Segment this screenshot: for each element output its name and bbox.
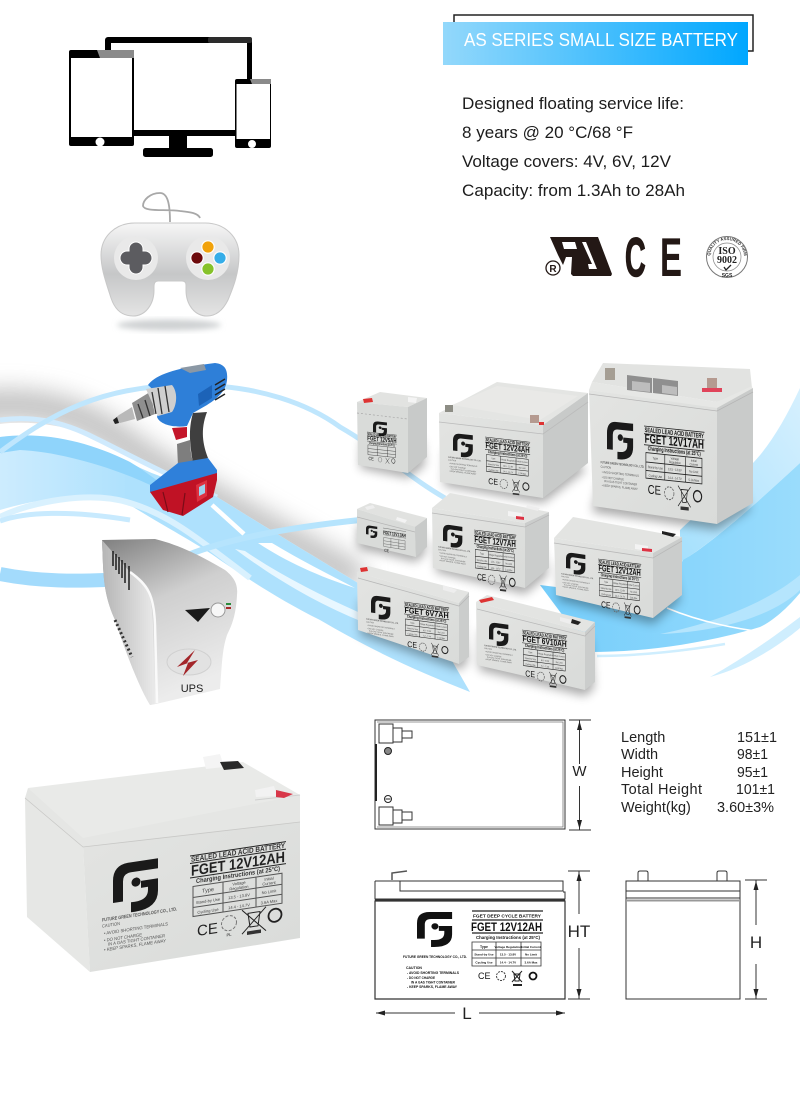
battery: 12V17AH: • KEEP SPARKS, FLAME AWAY bbox=[602, 483, 638, 491]
icon: monitor bbox=[105, 37, 252, 157]
battery: 12V7AH: • KEEP SPARKS, FLAME AWAY bbox=[439, 559, 467, 566]
label: caution: - DO NOT CHARGE bbox=[407, 976, 435, 980]
battery: 6V10AH: Stand-by Use bbox=[525, 657, 537, 661]
specification table: Total Height bbox=[621, 782, 702, 798]
battery: 12V17AH: CAUTION bbox=[601, 464, 611, 470]
battery: 12V24AH: • DO NOT CHARGE bbox=[449, 465, 466, 470]
battery: 12V17AH: 13.5 - 13.8V bbox=[668, 467, 682, 473]
battery: 12V12AH: • AVOID SHORTING TERMINALS bbox=[562, 578, 590, 585]
logo: FG mark bbox=[417, 912, 452, 947]
icon: cordless drill bbox=[113, 363, 227, 516]
battery: 12V7AH: No Limit bbox=[506, 562, 512, 566]
battery: 12V7AH: Type bbox=[480, 553, 484, 556]
specification table: 98±1 bbox=[737, 747, 768, 763]
specification table: Weight(kg) bbox=[621, 800, 691, 816]
battery: 12V12AH: 13.5 - 13.8V bbox=[615, 589, 625, 593]
battery: small 1.3Ah: FGET 12V1.3AH bbox=[383, 529, 406, 539]
battery: 6V10AH bbox=[476, 595, 595, 690]
battery: 6V7AH: SEALED LEAD ACID BATTERY bbox=[404, 602, 449, 613]
battery: 12V7AH: Voltage Regulation bbox=[488, 553, 504, 558]
label: caution: CAUTION bbox=[406, 966, 422, 970]
battery: 12V7AH: Charging Instructions (at 25°C) bbox=[477, 544, 514, 553]
caution text: IN A GAS TIGHT CONTAINER bbox=[108, 933, 166, 947]
battery: 12V17AH: CE bbox=[648, 483, 661, 498]
battery: 12V7AH: 14.4 - 14.7V bbox=[491, 567, 501, 571]
product label: PL bbox=[226, 932, 232, 938]
battery: 6V10AH: 7.2 - 7.4V bbox=[541, 666, 550, 669]
battery: 12V7AH: FGET 12V7AH bbox=[474, 534, 516, 550]
specification table: Length bbox=[621, 730, 665, 746]
feature text block: Voltage covers: 4V, 6V, 12V bbox=[462, 152, 672, 171]
product label: No Limit bbox=[262, 888, 277, 895]
dimension L bbox=[376, 1004, 565, 1023]
battery: 12V7AH: Cycling Use bbox=[477, 566, 487, 569]
product label: Cycling Use bbox=[197, 907, 219, 915]
icon: ISO seal: SGS bbox=[722, 273, 733, 279]
battery: 6V7AH: CE bbox=[407, 639, 417, 650]
battery: 12V12AH: Voltage Regulation bbox=[613, 581, 628, 587]
product label: Regulation bbox=[229, 884, 249, 892]
battery: 12V12AH: CE bbox=[601, 599, 611, 611]
battery: 6V10AH: No Limit bbox=[556, 661, 563, 665]
product label: FGET 12V12AH bbox=[191, 849, 285, 880]
feature text block: Capacity: from 1.3Ah to 28Ah bbox=[462, 181, 685, 200]
product label: 14.4 - 14.7V bbox=[228, 902, 250, 910]
battery: 12V24AH: 13.5 - 13.8V bbox=[503, 465, 514, 469]
icon: UPS unit: UPS bbox=[181, 683, 203, 695]
battery: 6V7AH: Stand-by Use bbox=[407, 627, 419, 631]
caution text: CAUTION bbox=[102, 921, 120, 929]
battery: 6V10AH: FUTURE GREEN TECHNOLOGY CO., LTD. bbox=[484, 645, 517, 652]
battery: 12V24AH: Initial Current bbox=[517, 460, 528, 464]
label: model: Type bbox=[480, 945, 488, 949]
battery: 12V24AH bbox=[439, 382, 588, 498]
battery: 12V24AH: 14.4 - 14.7V bbox=[503, 471, 514, 474]
battery: 6V10AH: Charging Instructions (at 25°C) bbox=[525, 643, 565, 653]
battery: 12V12AH: CAUTION bbox=[561, 575, 570, 579]
label: model: Initial Current bbox=[521, 945, 541, 949]
label: caution: IN A GAS TIGHT CONTAINER bbox=[411, 980, 456, 984]
icon: ISO seal: ISO bbox=[718, 246, 736, 257]
battery: 6V10AH: Type bbox=[528, 652, 533, 655]
specification table: 3.60±3% bbox=[717, 800, 774, 816]
product label: Charging Instructions (at 25°C) bbox=[196, 865, 280, 885]
battery: 12V17AH: No Limit bbox=[689, 469, 699, 475]
label: model: 3.6A Max bbox=[525, 960, 538, 964]
specification table: 95±1 bbox=[737, 765, 768, 781]
battery: 12V7AH: Stand-by Use bbox=[477, 558, 488, 563]
wave background bbox=[0, 385, 800, 720]
battery: 12V24AH: Type bbox=[491, 458, 496, 461]
top-view dimension drawing bbox=[375, 720, 591, 830]
battery: small 4: SEALED LEAD ACID BATTERY bbox=[367, 432, 396, 439]
label: model: No Limit bbox=[525, 952, 537, 956]
label: model: 13.5 - 13.8V bbox=[500, 952, 516, 956]
front-view dimension drawing bbox=[375, 871, 590, 1023]
battery: 6V7AH: Cycling Use bbox=[407, 633, 418, 637]
battery: 6V10AH: SEALED LEAD ACID BATTERY bbox=[522, 630, 567, 641]
battery: 6V7AH: FGET 6V7AH bbox=[404, 605, 449, 621]
battery: 12V24AH: SEALED LEAD ACID BATTERY bbox=[485, 437, 530, 447]
battery: 12V12AH: Cycling Use bbox=[601, 594, 612, 597]
battery: 6V7AH: 7.2 - 7.4V bbox=[423, 635, 432, 639]
battery: 12V24AH: 7.2A Max bbox=[518, 472, 527, 476]
battery: 6V7AH: Voltage Regulation bbox=[419, 622, 435, 628]
battery: 12V12AH: Type bbox=[604, 581, 609, 584]
battery: small 4: Charging Instructions (at 25°C) bbox=[369, 441, 395, 448]
battery: 6V7AH: 2.1A Max bbox=[437, 636, 445, 640]
large battery photo: 12V12AH bbox=[25, 754, 300, 972]
label: model bbox=[471, 911, 543, 966]
caution text: FUTURE GREEN TECHNOLOGY CO., LTD. bbox=[102, 906, 177, 924]
product label: SEALED LEAD ACID BATTERY bbox=[191, 841, 285, 864]
battery: 12V24AH: FGET 12V24AH bbox=[485, 440, 530, 455]
battery: 12V24AH: • KEEP SPARKS, FLAME AWAY bbox=[449, 470, 477, 476]
battery: 12V17AH: Voltage bbox=[671, 456, 679, 461]
icon: UPS unit bbox=[102, 539, 237, 705]
battery: 6V10AH: CE bbox=[525, 669, 535, 680]
battery: 12V17AH: Stand-by Use bbox=[648, 465, 663, 471]
battery: 12V12AH: Charging Instructions (at 25°C) bbox=[601, 573, 639, 582]
battery: 12V17AH: Type bbox=[653, 456, 658, 461]
dimension L: L bbox=[462, 1004, 472, 1023]
icon: ISO seal: 9002 bbox=[717, 255, 737, 266]
specification table: Width bbox=[621, 747, 658, 763]
battery: 12V7AH: FUTURE GREEN TECHNOLOGY CO., LTD. bbox=[438, 546, 471, 553]
battery: 12V12AH: SEALED LEAD ACID BATTERY bbox=[598, 559, 641, 570]
battery: 6V7AH: No Limit bbox=[438, 631, 445, 635]
product label: Voltage bbox=[232, 880, 246, 887]
battery: 12V17AH: 5.1A Max bbox=[689, 477, 699, 483]
battery: 12V7AH: • DO NOT CHARGE bbox=[439, 554, 456, 560]
battery: small 1.3Ah: CE bbox=[384, 548, 389, 553]
battery: 6V10AH: CAUTION bbox=[484, 647, 493, 651]
battery: 12V12AH: No Limit bbox=[630, 590, 637, 594]
battery: 12V24AH: Cycling Use bbox=[488, 469, 499, 473]
battery: 6V10AH: • DO NOT CHARGE bbox=[485, 653, 502, 659]
feature text block: 8 years @ 20 °C/68 °F bbox=[462, 123, 633, 142]
battery: 6V7AH: • AVOID SHORTING TERMINALS bbox=[367, 624, 395, 631]
battery: 12V12AH: FGET 12V12AH bbox=[598, 563, 641, 578]
dimension W: W bbox=[572, 763, 587, 780]
label: model: Voltage Regulation bbox=[495, 945, 522, 949]
caution text: • KEEP SPARKS, FLAME AWAY bbox=[104, 938, 166, 952]
battery: 12V17AH: Current bbox=[690, 462, 698, 467]
battery: small 4: CE bbox=[369, 456, 374, 462]
battery: 6V10AH: FGET 6V10AH bbox=[522, 634, 567, 649]
specification table: Height bbox=[621, 765, 663, 781]
icon: UR mark: R bbox=[549, 264, 557, 275]
battery: 12V24AH: FUTURE GREEN TECHNOLOGY CO., LTD. bbox=[448, 457, 482, 463]
battery: 12V12AH: IN A GAS TIGHT CONTAINER bbox=[564, 583, 589, 590]
caution text bbox=[102, 906, 177, 953]
battery: 6V10AH: • KEEP SPARKS, FLAME AWAY bbox=[485, 658, 513, 665]
battery: 12V12AH: • DO NOT CHARGE bbox=[562, 581, 579, 586]
battery: 12V17AH: 14.4 - 14.7V bbox=[668, 475, 682, 481]
battery: 12V17AH: • AVOID SHORTING TERMINALS bbox=[602, 470, 639, 478]
battery: small 4 bbox=[357, 392, 427, 473]
battery: 12V7AH: CE bbox=[477, 572, 487, 583]
product label bbox=[190, 841, 286, 944]
dimension HT: HT bbox=[568, 922, 590, 941]
battery: 6V7AH: Charging Instructions (at 25°C) bbox=[407, 614, 446, 624]
battery: 12V17AH bbox=[589, 363, 753, 524]
battery shadows bbox=[358, 440, 750, 696]
icon: CE mark: C bbox=[625, 227, 646, 289]
battery: 12V24AH: • AVOID SHORTING TERMINALS bbox=[449, 462, 478, 468]
caution text: • DO NOT CHARGE bbox=[104, 932, 142, 943]
battery: 12V17AH: Regulation bbox=[669, 460, 681, 465]
icon: tablet bbox=[69, 50, 134, 146]
label: caution: - KEEP SPARKS, FLAME AWAY bbox=[407, 985, 458, 989]
product label: CE bbox=[197, 920, 218, 940]
side-view dimension drawing bbox=[626, 871, 767, 999]
label: model: FGET DEEP CYCLE BATTERY bbox=[473, 914, 541, 918]
label: caution bbox=[403, 955, 467, 989]
battery: 12V7AH: • AVOID SHORTING TERMINALS bbox=[439, 551, 467, 559]
icon: CE mark letter E: E bbox=[660, 226, 682, 288]
icon: ISO seal: QUALITY ASSURED FIRM bbox=[707, 237, 747, 256]
label: model: Charging Instructions (at 25°C) bbox=[476, 935, 540, 940]
battery: 12V24AH: No Limit bbox=[519, 466, 526, 470]
battery: 12V17AH: FUTURE GREEN TECHNOLOGY CO., LTD. bbox=[601, 460, 644, 469]
battery: 12V24AH: IN A GAS TIGHT CONTAINER bbox=[451, 468, 477, 474]
battery: 6V10AH: Cycling Use bbox=[525, 664, 536, 667]
battery: 12V17AH: Charging Instructions (at 25°C) bbox=[648, 446, 701, 458]
label: compliance icons bbox=[478, 971, 536, 986]
label: model: FGET 12V12AH bbox=[471, 922, 542, 934]
battery: 12V12AH: • KEEP SPARKS, FLAME AWAY bbox=[562, 585, 590, 592]
battery: 12V17AH: Cycling Use bbox=[649, 473, 662, 479]
icon: UR mark bbox=[546, 237, 612, 276]
dimension H: H bbox=[750, 933, 762, 952]
product label: Stand-by Use bbox=[196, 896, 221, 905]
heading banner bbox=[443, 15, 753, 65]
battery: 12V7AH bbox=[432, 493, 549, 593]
product label: Type bbox=[202, 887, 214, 895]
dimension H bbox=[745, 880, 767, 999]
label: caution: FUTURE GREEN TECHNOLOGY CO., LTD. bbox=[403, 955, 467, 959]
battery: 12V7AH: SEALED LEAD ACID BATTERY bbox=[474, 530, 516, 541]
heading banner: AS SERIES SMALL SIZE BATTERY bbox=[464, 30, 738, 50]
icon: screen devices bbox=[69, 37, 271, 157]
certification marks bbox=[545, 226, 748, 289]
label: model: Cycling Use bbox=[475, 960, 493, 964]
battery: 6V7AH: IN A GAS TIGHT CONTAINER bbox=[369, 629, 394, 636]
product label: Current bbox=[262, 880, 277, 887]
battery: small 1.3Ah bbox=[357, 503, 427, 557]
label: compliance icons: CE bbox=[478, 971, 491, 981]
battery: 6V10AH: Initial Current bbox=[554, 654, 565, 659]
feature text block: Designed floating service life: bbox=[462, 94, 684, 113]
battery: 6V7AH: CAUTION bbox=[366, 620, 375, 625]
battery: 12V24AH: Stand-by Use bbox=[488, 463, 500, 467]
battery: 6V7AH bbox=[357, 566, 469, 664]
battery: 6V10AH: • AVOID SHORTING TERMINALS bbox=[485, 650, 513, 657]
battery: 12V12AH: 3.6A Max bbox=[630, 596, 638, 600]
battery: 12V7AH: 13.5 - 13.8V bbox=[491, 561, 501, 565]
battery: 12V17AH: Initial bbox=[691, 458, 697, 463]
battery: 12V12AH: Initial Current bbox=[628, 583, 639, 588]
label: model: 14.4 - 14.7V bbox=[500, 960, 516, 964]
battery: 12V24AH: CE bbox=[488, 476, 498, 487]
icon: game controller bbox=[101, 193, 239, 330]
label: caution: - AVOID SHORTING TERMINALS bbox=[407, 971, 459, 975]
battery: 12V17AH: SEALED LEAD ACID BATTERY bbox=[645, 427, 704, 441]
battery: 6V7AH: • KEEP SPARKS, FLAME AWAY bbox=[367, 631, 395, 638]
battery: 12V12AH: Stand-by Use bbox=[601, 586, 612, 591]
battery: 6V7AH: FUTURE GREEN TECHNOLOGY CO., LTD. bbox=[366, 619, 399, 625]
battery: 12V17AH: • DO NOT CHARGE bbox=[602, 475, 624, 482]
product label: 13.5 - 13.8V bbox=[228, 892, 250, 900]
battery: 12V7AH: 2.1A Max bbox=[505, 568, 513, 573]
battery: 6V7AH: Initial Current bbox=[436, 625, 447, 629]
battery: 6V7AH: • DO NOT CHARGE bbox=[367, 627, 384, 632]
specification table bbox=[621, 730, 777, 816]
battery: 12V7AH: Initial Current bbox=[504, 555, 514, 560]
product label: Initial bbox=[264, 876, 274, 882]
battery: 12V17AH: FGET 12V17AH bbox=[645, 432, 704, 452]
battery: 12V24AH: Charging Instructions (at 25°C) bbox=[488, 450, 528, 459]
battery: 12V24AH: CAUTION bbox=[448, 458, 457, 463]
specification table: 151±1 bbox=[737, 730, 777, 746]
battery: 6V10AH: IN A GAS TIGHT CONTAINER bbox=[487, 656, 512, 662]
dimension W bbox=[569, 720, 591, 830]
logo: FG mark bbox=[113, 858, 158, 915]
label: model: Stand-by Use bbox=[474, 952, 494, 956]
battery: 12V7AH: IN A GAS TIGHT CONTAINER bbox=[441, 557, 466, 564]
battery: 6V7AH: 6.8 - 6.9V bbox=[423, 630, 432, 633]
battery: small 4: FGET 12V5AH bbox=[367, 436, 396, 445]
icon: ISO seal bbox=[706, 236, 748, 279]
specification table: 101±1 bbox=[736, 782, 775, 798]
feature text block bbox=[462, 94, 685, 200]
dimension HT bbox=[568, 871, 590, 999]
battery: 6V10AH: 3.0A Max bbox=[555, 666, 564, 671]
battery: 12V7AH: CAUTION bbox=[438, 548, 447, 552]
battery: 6V10AH: 6.8 - 6.9V bbox=[541, 660, 550, 663]
battery: 12V17AH: IN A GAS TIGHT CONTAINER bbox=[604, 479, 637, 487]
icon: phone bbox=[235, 79, 271, 148]
battery: 12V12AH bbox=[554, 517, 682, 620]
battery: 6V10AH: Voltage Regulation bbox=[537, 652, 554, 657]
product label: 3.6A Max bbox=[261, 898, 277, 905]
battery: 12V24AH: Voltage Regulation bbox=[500, 458, 517, 463]
caution text: • AVOID SHORTING TERMINALS bbox=[104, 921, 168, 936]
battery: 12V12AH: FUTURE GREEN TECHNOLOGY CO., LTD. bbox=[561, 573, 594, 580]
battery: 6V7AH: Type bbox=[410, 622, 415, 625]
battery: 12V12AH: 14.4 - 14.7V bbox=[615, 595, 625, 599]
